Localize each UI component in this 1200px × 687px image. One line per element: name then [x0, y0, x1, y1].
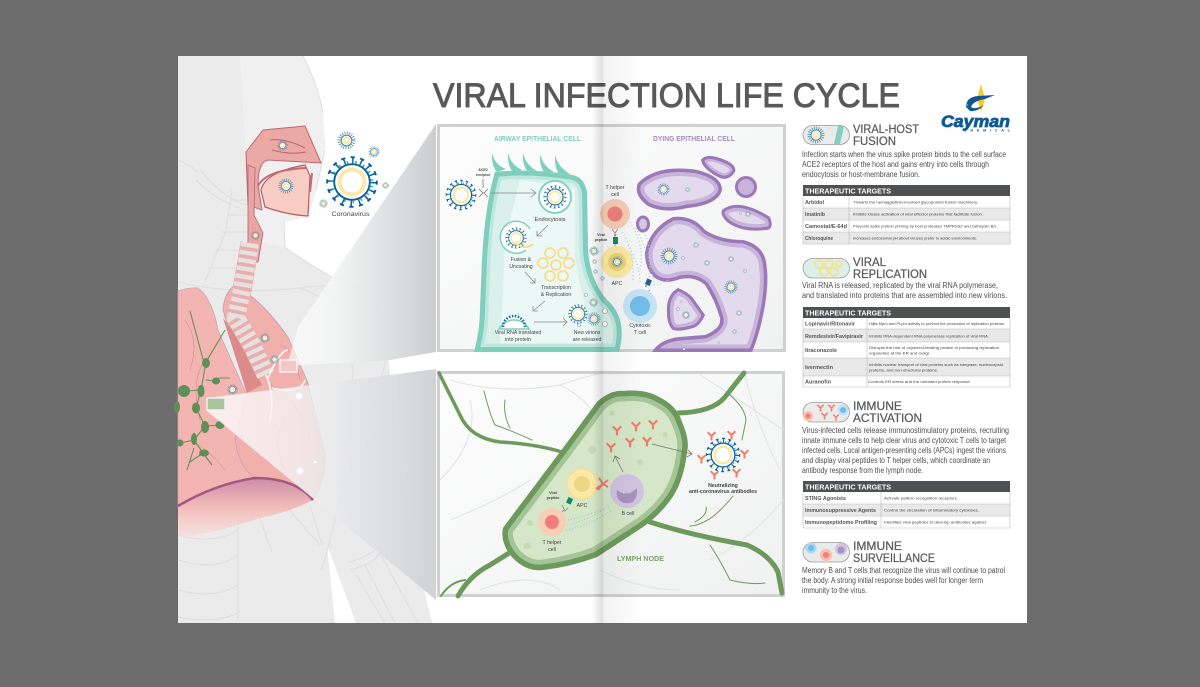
table header: THERAPEUTIC TARGETS	[805, 308, 891, 318]
body line 4: and display viral peptides to T helper cells, which coordinate an	[802, 456, 990, 465]
white bronchi	[266, 350, 305, 420]
row: Imatinib: Imatinib	[805, 212, 826, 218]
row: Itraconazole: Itraconazole	[805, 348, 837, 354]
row: Ivermectin: Ivermectin	[805, 365, 834, 371]
zoom wedge: airway	[287, 124, 436, 366]
label: peptide: peptide	[595, 238, 607, 242]
row: Immunosuppressive: Immunosuppressive Agents	[805, 508, 876, 514]
chemical: CHEMICAL	[964, 128, 1011, 132]
label: APC: APC	[612, 281, 623, 287]
cytotoxic T cell	[623, 289, 657, 323]
lymph vessels	[439, 373, 782, 596]
arrow	[533, 301, 545, 311]
dying cell blobs	[637, 156, 772, 352]
lower lung and diaphragm	[178, 477, 313, 537]
heading line 1: VIRAL-HOST	[853, 124, 919, 136]
fusion vesicle	[500, 221, 533, 253]
arrow: entry	[491, 189, 536, 197]
label: peptide: peptide	[547, 496, 559, 500]
table header: THERAPEUTIC TARGETS	[805, 482, 891, 492]
label: APC: APC	[577, 503, 588, 509]
RNA rings	[538, 248, 574, 281]
label: Cytotoxic: Cytotoxic	[629, 323, 651, 329]
viral peptide complex	[612, 229, 618, 251]
section: immune surveillance	[802, 541, 1005, 595]
label: Transcription: Transcription	[541, 285, 571, 291]
section: viral-host fusion	[802, 124, 1010, 244]
label: Coronavirus	[332, 211, 370, 218]
bronchial branches	[185, 320, 310, 470]
virions in dying cell	[659, 185, 750, 351]
coronavirus group	[320, 133, 388, 218]
desc 2: organelles at the ER and Golgi.	[869, 350, 930, 356]
desc: Control the circulation of inflammatory cytokines.	[884, 508, 979, 512]
body line 3: infected cells. Local antigen-presenting cells (APCs) ingest the virions	[802, 446, 1006, 455]
label: Fusion: Fusion &	[511, 257, 532, 263]
desc: Activate pattern recognition receptors.	[884, 496, 958, 500]
section: viral replication	[802, 257, 1010, 387]
table	[803, 307, 1010, 387]
table header: THERAPEUTIC TARGETS	[805, 186, 891, 196]
desc: Increases endosomal pH about viruses prefer in acidic environments.	[853, 236, 977, 240]
arrow	[534, 318, 567, 326]
row: Chloroquine: Chloroquine	[805, 236, 833, 242]
heading line 2: SURVEILLANCE	[853, 553, 935, 565]
label: Viral RNA: Viral RNA translated	[495, 330, 541, 336]
row: STING: STING Agonists	[805, 496, 846, 502]
desc: Identifies viral peptides to develop antibodies against.	[884, 520, 987, 524]
trachea	[236, 243, 266, 375]
T helper cell	[600, 199, 630, 229]
neutralized coronavirus	[698, 431, 748, 479]
translating vesicle	[499, 316, 529, 329]
desc: Thwarts the hemagglutinin-involved glycoprotein fusion machinery.	[853, 200, 978, 204]
lymph node body	[502, 391, 688, 570]
label: are released: are released	[573, 337, 602, 343]
page	[178, 56, 1027, 623]
wordmark: Cayman	[941, 112, 1010, 131]
panel: airway and dying cells	[438, 126, 784, 352]
label: T helper: T helper	[606, 185, 625, 191]
label: Neutralizing: Neutralizing	[708, 483, 738, 489]
nasal cavity	[246, 126, 321, 210]
body line 3: immunity to the virus.	[802, 586, 867, 595]
label: antibodies: anti-coronavirus antibodies	[689, 489, 757, 495]
row: Lopinavir: Lopinavir/Ritonavir	[805, 322, 856, 328]
desc: Inhibits RNA-dependent RNA polymerase replication of viral RNA.	[869, 334, 989, 338]
mouth	[261, 165, 310, 216]
endosome	[539, 181, 571, 213]
desc: Prevents spike protein priming by host proteases TMPRSS2 and cathepsin B/L.	[853, 224, 998, 228]
arrow	[537, 225, 548, 236]
arrow: up	[613, 456, 623, 472]
APC	[601, 246, 633, 278]
APC	[567, 469, 597, 499]
row: Remdesivir: Remdesivir/Favipiravir	[805, 334, 864, 340]
arrow: to virus	[652, 444, 692, 457]
desc: Controls ER stress and the unfolded protein response.	[868, 379, 971, 384]
body line 1: Infection starts when the virus spike protein binds to the cell surface	[802, 150, 1006, 159]
label: T helper: T helper	[543, 540, 562, 546]
main coronavirus	[327, 157, 377, 207]
body line 3: endocytosis or host-membrane fusion.	[802, 170, 920, 179]
label: Viral: Viral	[549, 491, 557, 495]
receptor label: receptor	[476, 173, 491, 177]
airway cell	[474, 153, 622, 352]
body line 2: and translated into proteins that are assembled into new virions.	[802, 291, 1007, 300]
body line 2: innate immune cells to help clear virus and cytotoxic T cells to target	[802, 436, 1007, 445]
icon	[803, 402, 850, 422]
body line 5: antibody response from the lymph node.	[802, 466, 923, 475]
icon	[803, 542, 850, 562]
ACE2 label: ACE2	[478, 168, 488, 172]
signal dots	[622, 222, 668, 288]
logo mark	[966, 84, 995, 112]
row: Auranofin: Auranofin	[805, 380, 832, 386]
heading: airway: AIRWAY EPITHELIAL CELL	[494, 134, 581, 143]
small virions in airway	[228, 141, 292, 394]
label: Uncoating: Uncoating	[509, 264, 533, 270]
faded virions	[296, 392, 317, 474]
table	[803, 185, 1010, 244]
lymph nodes	[174, 358, 224, 456]
label: LYMPH NODE: LYMPH NODE	[617, 554, 664, 563]
heading line 2: FUSION	[853, 136, 896, 148]
icon	[803, 258, 850, 278]
new virions	[569, 294, 608, 326]
logo: Cayman Chemical	[941, 84, 1011, 132]
heading line 2: ACTIVATION	[853, 413, 922, 425]
icon	[803, 126, 850, 144]
label: Replication: & Replication	[541, 292, 571, 298]
label: cell: cell	[548, 547, 556, 553]
antibodies in node	[607, 420, 657, 452]
panel: lymph node	[438, 372, 784, 596]
heading line 2: REPLICATION	[853, 269, 927, 281]
desc: Hijits Mpro and PLpro activity to prevent the production of replication proteins.	[869, 321, 1005, 326]
title: VIRAL INFECTION LIFE CYCLE	[433, 77, 900, 115]
label: Endocytosis: Endocytosis	[534, 217, 566, 223]
T helper cell	[538, 508, 566, 536]
table	[803, 481, 1010, 528]
desc: Inhibits kinase activation of viral effector proteins that facilitate fusion.	[853, 212, 983, 216]
heading line 1: IMMUNE	[853, 541, 902, 553]
faint background vessels	[440, 374, 783, 590]
lymph vessels	[180, 311, 230, 470]
nearby virions	[590, 247, 604, 280]
location marker: lymph node	[207, 398, 225, 410]
row: Immunopeptidome: Immunopeptidome Profiling	[805, 520, 877, 526]
viral peptide receptor	[562, 497, 573, 512]
body line 2: the body. A strong initial response bodes well for longer term	[802, 576, 983, 585]
body line 1: Viral RNA is released, replicated by the viral RNA polymerase,	[802, 281, 998, 290]
infographic spread	[174, 56, 1027, 624]
body line 2: ACE2 receptors of the host and gains entry into cells through	[802, 160, 989, 169]
peptide on cytotoxic T cell	[643, 278, 652, 297]
arrow	[525, 272, 535, 283]
ACE2 receptor	[479, 179, 488, 197]
label: T cell: T cell	[634, 330, 646, 336]
body illustration	[174, 56, 432, 623]
right lung	[223, 285, 325, 500]
label: into protein: into protein	[505, 337, 531, 343]
book spine shadow	[592, 56, 642, 623]
desc 2: proteins, and non-structural proteins.	[869, 368, 938, 372]
location marker: airway	[280, 360, 297, 372]
section: immune activation	[802, 401, 1010, 528]
body line 1: Memory B and T cells that recognize the virus will continue to patrol	[802, 566, 1005, 575]
silhouette	[178, 56, 432, 623]
left lung	[178, 288, 258, 507]
pharynx	[246, 165, 263, 262]
row: Camostat: Camostat/E-64d	[805, 224, 847, 230]
heading: dying: DYING EPITHELIAL CELL	[653, 134, 735, 143]
desc 1: Inhibits nuclear transport of viral proteins such as integrase, nucleocapsid	[869, 362, 1003, 367]
signal dots	[566, 505, 612, 530]
label: cell: cell	[611, 192, 619, 198]
label: Viral: Viral	[597, 233, 605, 237]
antibody on B cell	[596, 478, 608, 490]
label: B cell: B cell	[622, 511, 634, 517]
label: New virions: New virions	[574, 330, 601, 336]
faint skeleton	[178, 56, 418, 623]
heading line 1: VIRAL	[853, 257, 887, 269]
heading line 1: IMMUNE	[853, 401, 902, 413]
virus entering	[446, 180, 476, 210]
zoom wedge: lymph node	[207, 369, 436, 600]
body line 1: Virus-infected cells release immunostimulatory proteins, recruiting	[802, 426, 1009, 435]
desc 1: Disrupts the role of oxysterol-binding protein in producing replication	[869, 345, 999, 350]
row: Arbidol: Arbidol	[805, 200, 824, 206]
B cell	[610, 474, 644, 508]
face highlight	[240, 56, 325, 247]
